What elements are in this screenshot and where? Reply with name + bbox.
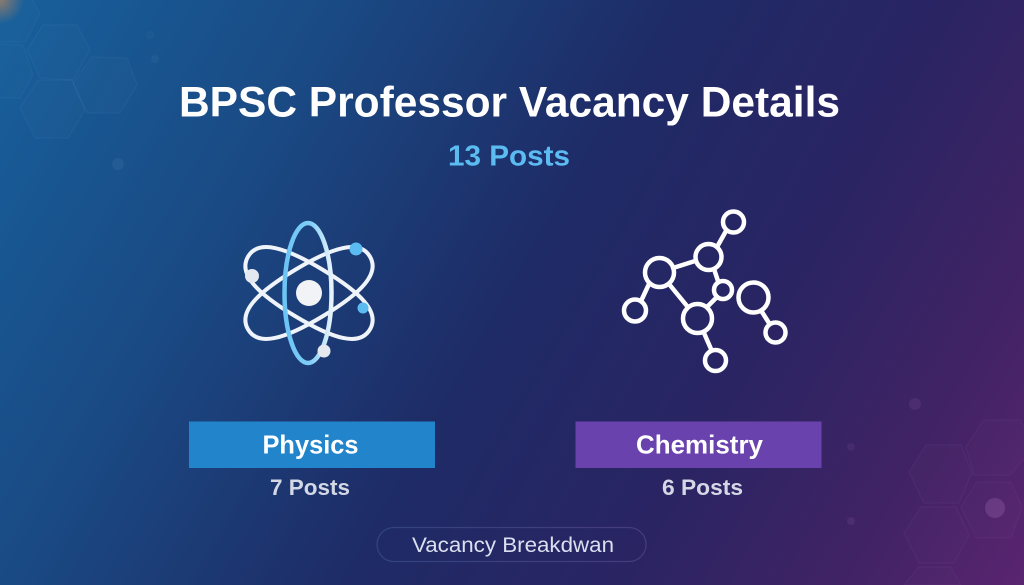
chemistry label bar: Chemistry: [636, 430, 764, 460]
physics post count: 7 Posts: [270, 475, 350, 500]
physics label bar: Physics: [262, 430, 358, 460]
icon: atom: [234, 223, 384, 363]
decorative glow dots: [112, 31, 1005, 525]
subtitle: 13 posts: 13 Posts: [448, 140, 570, 172]
footer pill: [377, 528, 646, 562]
decorative hexagons: top left: [0, 0, 137, 138]
footer pill: Vacancy Breakdwan: [412, 534, 614, 557]
physics label bar: [189, 422, 435, 468]
title: BPSC Professor Vacancy Details: [179, 80, 840, 126]
chemistry label bar: [576, 422, 822, 468]
decorative hexagons: bottom right: [904, 420, 1024, 585]
chemistry post count: 6 Posts: [662, 475, 743, 500]
icon: molecule: [624, 212, 786, 371]
